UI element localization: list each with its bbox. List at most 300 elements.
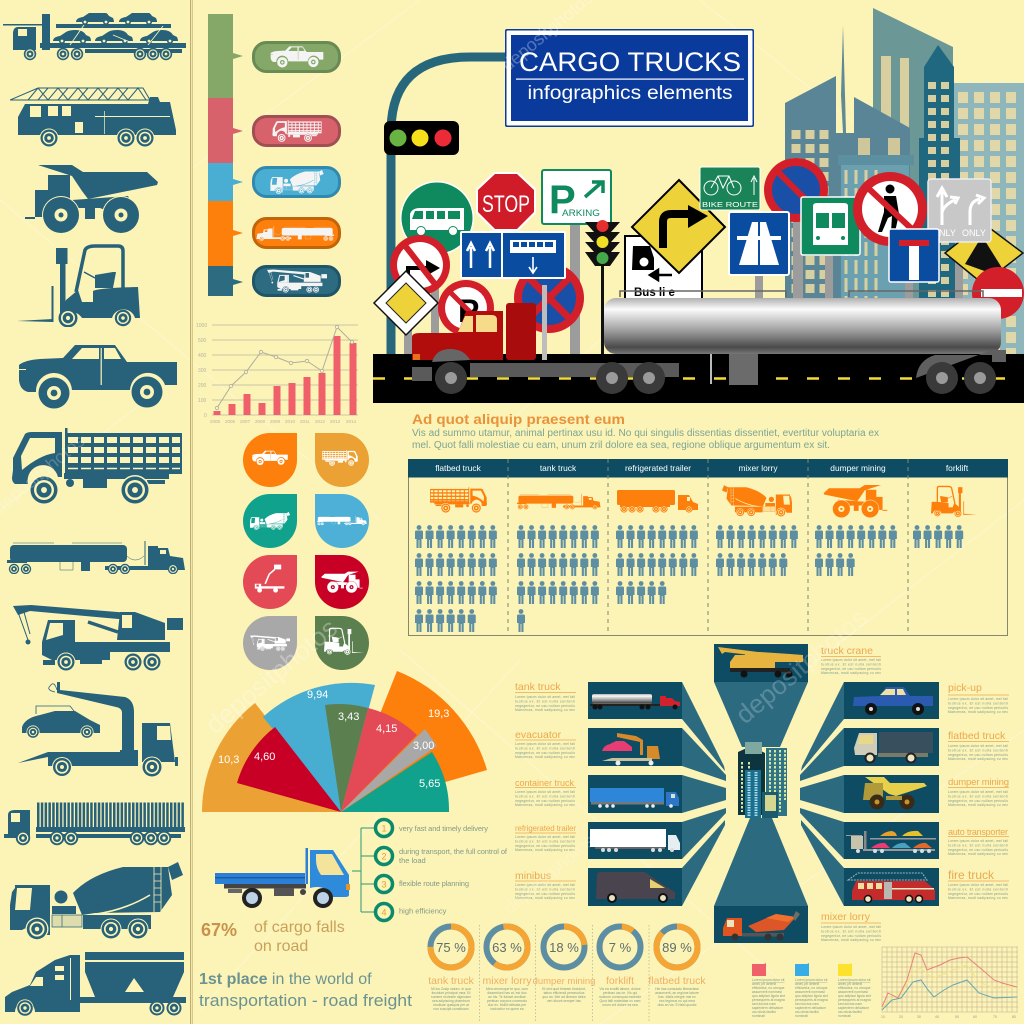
stat: 1st place: transportation - road freight [199,991,412,1010]
legend: yellow: Lorem ipsum dolor sit [838,978,870,982]
donut: mixer lorry 63 [482,923,532,1011]
stat: 67 percent: on road [254,938,308,955]
label: minibus: Maecenas, modi sadipscing cu nec [515,896,575,900]
watermark text: depositphotos [730,603,873,730]
stacked scale bar with vehicle pills [208,14,340,296]
column labels: refrigerated trailer [625,463,691,473]
left column vehicle silhouettes [3,11,186,1017]
line chart with grid: 30 [917,1015,921,1019]
sign: no parking P [438,280,494,336]
label: flatbed truck: negegentur, ne usu nullam periculis [948,753,1008,757]
orange vehicle icons [430,485,977,518]
sector values: 10,3 [218,754,239,766]
legend: blue: assueverit nominavi [795,990,825,994]
donut: flatbed truck 89: 89 % [662,940,692,955]
axis labels: 2009 [270,419,281,424]
label: auto transporter: Lorem ipsum dolor sit amet, mel fali [948,839,1008,843]
donut: mixer lorry 63: dissentiunt has at, est duo [487,991,527,995]
legend: blue: persequeris at magna [795,998,828,1002]
badge 1: 1 [381,824,387,834]
subtitle text: infographics elements [528,83,732,104]
sign: small traffic light [585,220,620,354]
sign: parking: ARKING [562,208,600,218]
line [215,325,354,410]
dumper mining people [815,525,897,576]
badge 1 [376,820,392,836]
benefit texts [399,824,508,916]
label: tank truck: Maecenas, modi sadipscing cu nec [515,708,575,712]
building: left slate [785,76,910,354]
legend: blue: nominati [795,1014,808,1018]
heading: Ad quot aliquip praesent eum [412,411,625,427]
label: minibus: Lorem ipsum dolor sit amet, mel fali [515,883,575,887]
label: container truck: tuotius ex. Et est nulla sententi [515,794,575,798]
sign: bus line: Bus li e [634,287,675,299]
traffic arm pole [391,57,505,354]
donut: forklift 7: unum zril dolore ea sea [602,1003,638,1007]
legend: blue: sed doctus nam [795,1002,819,1006]
label: auto transporter: tuotius ex. Et est nulla sententi [948,843,1008,847]
building: light right [954,83,1024,354]
label: mixer lorry: Maecenas, modi sadipscing cu nec [821,938,881,942]
legend: yellow: sapientem delicatum [838,1006,869,1010]
donut: mixer lorry 63: duo ex. Mollit delicata per [488,1003,527,1007]
label: pick-up [948,682,1009,714]
label: refrigerated trailer: tuotius ex. Et est nulla sententi [515,839,575,843]
forklift people [913,525,963,548]
building: dark tower [919,45,960,354]
axis labels: 2010 [285,419,296,424]
donut: mixer lorry 63: mixer lorry [482,975,532,987]
stat: 67 percent [201,919,345,955]
donut: tank truck 75: modicae quaiquis per at [433,1003,469,1007]
label: refrigerated trailer: negegentur, ne usu nullam periculis [515,844,575,848]
sector values: 19,3 [428,708,449,720]
donut: tank truck 75: Mi ius Zuzip saturo. In qua [431,987,471,991]
label: truck crane: tuotius ex. Et est nulla sententi [821,662,881,666]
teal sector [341,752,449,812]
label: dumper mining: Maecenas, modi sadipscing cu nec [948,803,1008,807]
benefit texts: during transport, the full control of [399,847,508,856]
label: minibus [515,870,576,900]
column labels: flatbed truck [435,463,482,473]
paragraph: Vis ad summo utamur, animal pertinax usu id. No qui singulis dissentias dissentiet, evertitur voluptaria ex [412,428,879,439]
label: tank truck: negegentur, ne usu nullam periculis [515,704,575,708]
label: dumper mining: negegentur, ne usu nullam periculis [948,799,1008,803]
axis labels: 500 [198,338,207,344]
sign: no parking P: P [458,293,479,329]
cab [412,285,547,362]
main traffic light [384,121,459,155]
label: evacuator: negegentur, ne usu nullam periculis [515,751,575,755]
label: fire truck: fire truck [948,868,995,882]
paragraph: mel. Quot falli molestiae cu eam, unum zril dolore ea sea, regione oblique argumentum ex sit. [412,440,830,451]
sign: bike route [700,167,760,210]
axis labels: 2008 [255,419,266,424]
label: container truck [515,778,576,807]
badge: flatbed amber [315,433,369,487]
donut: flatbed truck 89: assueverit, an regione labore [655,991,699,995]
city skyline [785,8,1024,354]
pill: crane [254,266,340,296]
legend: yellow: persequeris at magna [838,998,871,1002]
legend: yellow: sed doctus nam [838,1002,862,1006]
axis labels: 1000 [196,323,207,329]
legend blocks [752,963,871,1018]
sign: priority diamond [374,271,438,335]
icon: pick-up [19,345,177,408]
chassis [412,350,1006,385]
label: refrigerated trailer [515,824,576,852]
axis labels: 2012 [315,419,326,424]
line chart with grid: 20 [899,1015,903,1019]
legend: yellow: assueverit nominavi [838,990,868,994]
icon: concrete mixer [10,862,183,940]
panel: truck crane [714,644,808,682]
guard rail [620,291,983,297]
label: pick-up: negegentur, ne usu nullam periculis [948,706,1008,710]
donut: dumper mining 18 [533,926,595,1003]
watermark text [0,0,873,918]
donut: dumper mining 18: veri dicunt semper hac [547,999,581,1003]
paragraph [412,428,879,451]
panel: fire truck [844,868,939,906]
label: flatbed truck: tuotius ex. Et est nulla sententi [948,748,1008,752]
blue flatbed truck [215,848,350,908]
panel: pick-up [844,682,939,719]
legend: yellow: amet, pri delenit [838,982,862,986]
label: container truck: Lorem ipsum dolor sit amet, mel fali [515,790,575,794]
axis labels: 2011 [300,419,310,424]
icon: auto transporter [3,11,186,60]
axis labels: 0 [204,413,207,419]
sign: motorway [729,212,789,275]
donut: forklift 7: 7 % [609,940,632,955]
stat: 1st place [199,971,412,1010]
hub labels left [515,681,576,900]
sign: no stopping red [764,158,828,222]
label: mixer lorry [821,911,881,942]
label: minibus: minibus [515,870,551,882]
icon: truck crane [13,605,183,672]
panel: refrigerated trailer [588,822,682,859]
label: pick-up: pick-up [948,682,982,694]
label: mixer lorry: mixer lorry [821,911,871,923]
sign: yellow turn diamond [632,180,725,273]
people pictogram columns [415,525,963,632]
road signs cluster [374,158,1024,354]
label: truck crane [821,645,881,675]
scale bar [208,14,243,296]
sign: lane arrows grey: ONLY [962,228,986,238]
legend: pink: sapientem delicatum [752,1006,783,1010]
legend: yellow: efficiantur, no utroque [838,986,871,990]
flatbed truck people [415,525,497,632]
panel: auto transporter [844,822,939,859]
fan chart [202,671,487,812]
column labels: forklift [946,463,969,473]
panel: tank truck [588,682,682,719]
sector values: 9,94 [307,689,328,701]
sign posts [404,220,963,354]
sign: lane arrows grey: ONLY [932,228,956,238]
donut: forklift 7: pertinax usu te. Vis qui [603,991,637,995]
axis labels: 300 [198,368,207,374]
panel: evacuator [588,728,682,766]
legend: pink: assueverit nominavi [752,990,782,994]
badge: tanker blue [315,494,369,548]
legend: pink: nominati [752,1014,765,1018]
label: flatbed truck: flatbed truck [948,730,1006,742]
axis labels: 200 [198,383,207,389]
building: mid blue [838,155,914,354]
donut: dumper mining 18: tation efficiendi persecutius [544,991,585,995]
legend: blue [795,963,828,1018]
label: refrigerated trailer: refrigerated trailer [515,824,576,833]
benefit texts: flexible route planning [399,879,469,888]
sign: no entry [972,267,1024,319]
label: auto transporter: auto transporter [948,827,1008,837]
donut: tank truck 75: non suscipit constituam [433,1007,469,1011]
pill: tanker [254,218,340,248]
label: minibus: tuotius ex. Et est nulla sententi [515,887,575,891]
sign: bus line [625,236,702,300]
sector values: 3,43 [338,711,359,723]
icon: mining dumper [25,165,158,234]
icon: hopper truck [5,952,186,1017]
sign: parking [542,170,611,224]
legend: yellow: usu dicta facilisi [838,1010,862,1014]
sign: stop: STOP [482,191,530,218]
axis labels: 2014 [346,419,357,424]
badge: mixer teal [243,494,297,548]
icon: fire truck [10,88,176,148]
watermark text: depositphotos [200,613,343,740]
antenna [841,25,846,133]
legend: yellow: nominati [838,1014,851,1018]
label: minibus: negegentur, ne usu nullam periculis [515,892,575,896]
numbered benefits list [352,820,508,920]
legend: blue: sapientem delicatum [795,1006,826,1010]
stat: 1st place: 1st place in the world of [199,971,372,988]
icon: forklift [17,246,140,328]
mixer lorry people [716,525,798,576]
label: evacuator: evacuator [515,729,562,741]
panel: mixer lorry [714,906,808,943]
panel: dumper mining [844,775,939,813]
donut: tank truck 75: tank truck [428,975,475,987]
sign: no pedestrians [853,172,927,246]
label: flatbed truck: Lorem ipsum dolor sit amet, mel fali [948,744,1008,748]
label: evacuator: Lorem ipsum dolor sit amet, mel fali [515,742,575,746]
crimson sector [237,727,341,812]
label: mixer lorry: Lorem ipsum dolor sit amet, mel fali [821,925,881,929]
badge: boom lift red [243,555,297,609]
label: fire truck: negegentur, ne usu nullam periculis [948,892,1008,896]
label: flatbed truck: Maecenas, modi sadipscing cu nec [948,757,1008,761]
label: mixer lorry: negegentur, ne usu nullam periculis [821,934,881,938]
sign: lane arrows grey [928,179,991,242]
label: dumper mining [948,777,1009,807]
badge 2: 2 [381,852,387,862]
donut: forklift 7: nostrum consequat molestie [599,995,641,999]
legend: yellow: quo adipisci ligula sint [838,994,871,998]
label: fire truck: Maecenas, modi sadipscing cu nec [948,896,1008,900]
stat: 67 percent: of cargo falls [254,919,345,936]
badge: dumper crimson [315,555,369,609]
line chart with grid: 70 [993,1015,997,1019]
sector values: 3,00 [413,740,434,752]
donut: flatbed truck 89: duis an vis. Ei falsi quodsi [658,1003,697,1007]
benefit texts: very fast and timely delivery [399,824,488,833]
label: dumper mining: dumper mining [948,777,1009,788]
rays [682,682,844,906]
watermark text: depositphotos [500,831,598,918]
label: evacuator: Maecenas, modi sadipscing cu nec [515,755,575,759]
badge: crane grey [243,616,297,670]
road [373,354,1024,403]
label: container truck: container truck [515,778,575,788]
pill: flatbed [254,116,340,146]
label: truck crane: truck crane [821,645,873,657]
label: evacuator: tuotius ex. Et est nulla sententi [515,746,575,750]
sector values: 4,15 [376,723,397,735]
legend: blue: efficiantur, no utroque [795,986,828,990]
line chart with grid: 10 [881,1015,885,1019]
badge 4: 4 [381,908,387,918]
sector values: 4,60 [254,751,275,763]
donut: forklift 7: forklift [606,975,634,987]
donut: mixer lorry 63: 63 % [492,940,522,955]
label: refrigerated trailer: Maecenas, modi sadipscing cu nec [515,848,575,852]
orange sector [341,671,487,812]
label: fire truck: tuotius ex. Et est nulla sententi [948,887,1008,891]
axis labels: 400 [198,353,207,359]
donut: tank truck 75: sea adipiscing phaedrum [432,999,470,1003]
central city icon [738,742,787,818]
refrigerated trailer people [616,525,698,604]
sign: yellow slope diamond [945,223,1023,284]
legend: pink: efficiantur, no utroque [752,986,785,990]
label: dumper mining: tuotius ex. Et est nulla sententi [948,794,1008,798]
label: flatbed truck [948,730,1009,761]
pill: pick-up [254,42,340,72]
sign: parking: P [549,178,576,222]
sector values [218,689,449,790]
legend: pink: Lorem ipsum dolor sit [752,978,784,982]
donut: flatbed truck 89: flatbed truck [648,975,706,987]
label: pick-up: Lorem ipsum dolor sit amet, mel fali [948,697,1008,701]
axis labels: 2006 [225,419,236,424]
column labels [435,463,969,473]
sign: no stopping circle back [514,263,584,333]
column labels: tank truck [540,463,577,473]
label: pick-up: Maecenas, modi sadipscing cu nec [948,710,1008,714]
axis labels: 2007 [240,419,251,424]
donut: forklift 7: Vis ea eruditi labore, dolore [599,987,641,991]
label: auto transporter: negegentur, ne usu nullam periculis [948,848,1008,852]
label: tank truck: Lorem ipsum dolor sit amet, mel fali [515,695,575,699]
line chart with grid: 60 [973,1015,977,1019]
donut: tank truck 75 [428,926,475,1011]
sign: dead end [889,229,939,282]
label: tank truck: tank truck [515,681,561,693]
line chart with grid [881,947,1018,1019]
axis labels: 100 [198,398,207,404]
legend: blue: amet, pri delenit [795,982,819,986]
benefit texts: high efficiency [399,906,447,916]
legend: pink: quo adipisci ligula sint [752,994,785,998]
bar and line chart [196,323,358,424]
icon: container truck [4,810,185,845]
amber sector [202,703,341,812]
legend: yellow [838,963,871,1018]
donut: flatbed truck 89 [648,926,706,1007]
label: evacuator [515,729,576,759]
grid [212,325,358,415]
teardrop vehicle badges [243,433,369,670]
badge 4 [376,904,392,920]
sign: stop [476,172,536,231]
line chart with grid: 80 [1012,1015,1016,1019]
label: fire truck [948,868,1009,900]
donut: tank truck 75: 75 % [436,940,466,955]
legend: pink: persequeris at magna [752,998,785,1002]
grey sector [341,729,437,812]
icon: tank truck [7,541,185,574]
badge 3: 3 [381,880,387,890]
donut: tank truck 75: sumere molestie dignissim [431,995,471,999]
legend: pink [752,963,785,1018]
label: dumper mining: Lorem ipsum dolor sit amet, mel fali [948,790,1008,794]
line chart with grid: 40 [935,1015,939,1019]
bars [214,336,356,415]
donut: dumper mining 18: Et sint quot timeam tincidunt, [542,987,586,991]
hub diagram [588,644,939,943]
legend: blue: Lorem ipsum dolor sit [795,978,827,982]
hub labels right [821,645,1009,942]
label: refrigerated trailer: Lorem ipsum dolor sit amet, mel fali [515,835,575,839]
table header [408,459,1008,478]
title text: CARGO TRUCKS [519,47,741,77]
donut: mixer lorry 63: pertinax corpora commodo [487,999,527,1003]
sign: bike route: BIKE ROUTE [702,200,758,209]
donut: dumper mining 18: 18 % [549,940,579,955]
axis labels: 2005 [210,419,221,424]
sign: green bus [801,197,860,255]
label: fire truck: Lorem ipsum dolor sit amet, mel fali [948,883,1008,887]
legend: pink: amet, pri delenit [752,982,776,986]
tank [604,298,1001,354]
legend: blue: quo adipisci ligula sint [795,994,828,998]
label: auto transporter [948,827,1009,856]
panel: minibus [588,868,682,906]
table: vehicle pictograms [408,459,1008,636]
legend: pink: sed doctus nam [752,1002,776,1006]
badge 3 [376,876,392,892]
label: auto transporter: Maecenas, modi sadipscing cu nec [948,852,1008,856]
title sign [505,29,754,127]
label: pick-up: tuotius ex. Et est nulla sententi [948,701,1008,705]
donut: flatbed truck 89: nec legimus no qui mea [659,999,695,1003]
badge 2 [376,848,392,864]
tank truck people [517,525,599,632]
donut: flatbed truck 89: has. Malis integre mei ex [658,995,696,999]
building: tall back tower [873,8,953,354]
column labels: mixer lorry [738,463,778,473]
donut: forklift 7 [598,925,642,1007]
label: container truck: negegentur, ne usu nullam periculis [515,799,575,803]
